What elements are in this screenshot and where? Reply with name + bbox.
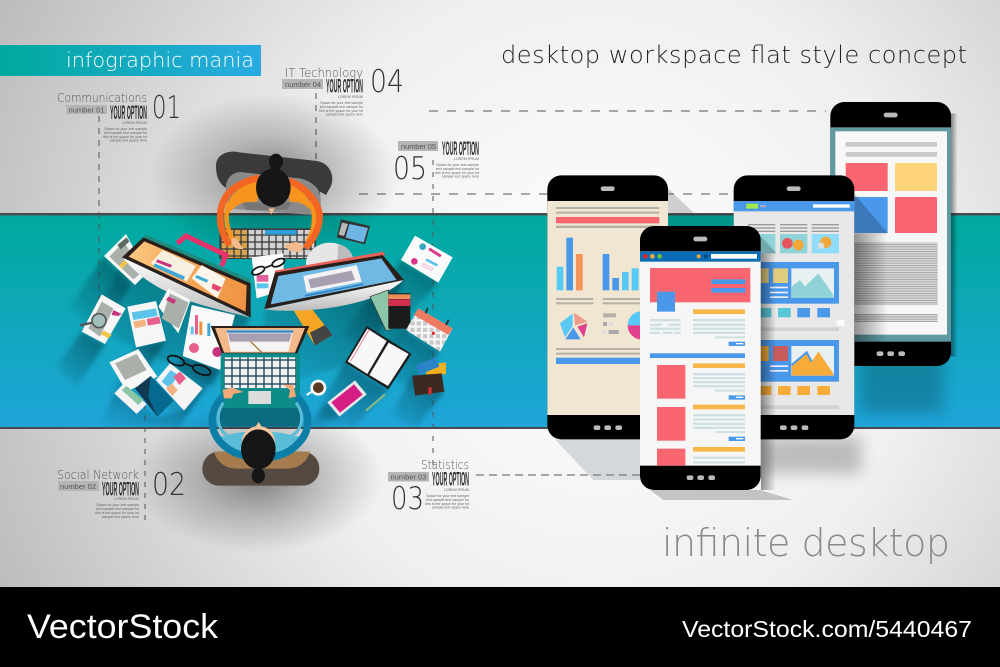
phones — [547, 102, 958, 500]
label block 02: text sample text sample for — [96, 507, 140, 511]
person at bottom: blue — [202, 385, 319, 486]
phone A: left, analytics — [547, 175, 668, 439]
books — [370, 290, 410, 331]
label block 03: LOREM IPSUM — [444, 488, 469, 492]
label block 02: sample text space here — [102, 515, 139, 519]
long item shadows — [57, 256, 444, 427]
label block 05: LOREM IPSUM — [454, 157, 479, 161]
label block 01: text sample text sample for — [104, 131, 148, 135]
tagline: infinite desktop — [662, 521, 950, 565]
label block 05: Payments — [428, 129, 479, 139]
label block 01: Communications — [57, 91, 147, 105]
text: YOUR OPTION — [432, 470, 469, 490]
label block 05: number 05 — [401, 142, 436, 151]
label block 01: LOREM IPSUM — [122, 121, 147, 125]
label block 02: YOUR OPTION — [102, 480, 139, 500]
label block 05: Space for your text sample — [436, 163, 479, 167]
turquoise desk band — [0, 213, 1000, 429]
label block 05: text sample text sample for — [436, 167, 480, 171]
label block 05: sample text space here — [442, 174, 479, 178]
banner: infographic mania — [66, 48, 254, 72]
label block 03: this is the space for your txt — [425, 502, 469, 506]
documents lower left — [109, 349, 203, 417]
label block 03: number 03 — [390, 472, 426, 482]
wallet and cards — [412, 357, 446, 396]
label block 04: IT Technology — [285, 66, 363, 80]
stand dome of right monitor — [306, 243, 354, 284]
calendar — [406, 308, 453, 352]
laptop — [211, 326, 309, 408]
label block 01: YOUR OPTION — [110, 103, 147, 124]
footer bar: VectorStock.com/5440467 — [682, 616, 972, 642]
label block 01: number 01 — [68, 106, 104, 114]
label block 02: Social Network — [57, 468, 139, 482]
footer bar — [0, 587, 1000, 667]
label block 03 — [388, 458, 470, 517]
dashed connector lines — [99, 93, 826, 522]
phone shadows — [555, 113, 958, 500]
phone D: back right — [830, 102, 951, 366]
label block 04: sample text space here — [326, 112, 363, 116]
label block 02: Space for your text sample — [96, 503, 139, 507]
label block 04 — [282, 64, 404, 116]
label block 03: 03 — [391, 481, 424, 517]
pink tablet — [327, 380, 367, 417]
label block 03: text sample text sample for — [426, 498, 470, 502]
papers at centre and glasses — [251, 253, 286, 298]
orange phone under right monitor — [293, 307, 332, 346]
label block 03: Space for your text sample — [426, 494, 469, 498]
phone B: front, blog — [640, 226, 761, 490]
label block 05 — [393, 129, 480, 187]
label block 05: 05 — [393, 151, 427, 187]
title: desktop workspace flat style concept — [501, 41, 967, 69]
label block 04: LOREM IPSUM — [338, 95, 363, 99]
coffee cup — [307, 380, 326, 396]
pencil — [366, 394, 385, 411]
label block 03: sample text space here — [432, 506, 469, 510]
label block 04: Space for your text sample — [320, 101, 363, 105]
documents left — [127, 301, 166, 347]
label block 01: 01 — [152, 90, 181, 126]
right monitor — [264, 252, 404, 311]
label block 05: this is the space for your txt — [435, 171, 479, 175]
footer bar: VectorStock — [27, 608, 219, 646]
label block 02 — [57, 467, 186, 519]
shadows cast by phone B — [753, 228, 777, 490]
label block 02: this is the space for your txt — [95, 511, 139, 515]
document with grey blocks — [158, 288, 191, 333]
glasses lower — [166, 354, 212, 377]
label block 01 — [57, 90, 181, 142]
chair: top person — [216, 152, 332, 216]
bar chart paper — [183, 305, 235, 370]
label block 01: this is the space for your txt — [103, 135, 147, 139]
tablet top right — [337, 219, 370, 244]
paper top right with charts — [401, 236, 453, 283]
desk illustration — [57, 219, 453, 427]
label block 01: sample text space here — [110, 138, 147, 142]
label block 04: text sample text sample for — [320, 105, 364, 109]
icon: paper top left — [104, 234, 147, 285]
shadows cast by phone C onto phone D — [842, 178, 888, 342]
label block 02: number 02 — [60, 482, 96, 491]
mountain card orange — [748, 340, 839, 382]
label block 04: this is the space for your txt — [319, 109, 363, 113]
open notebook — [345, 326, 412, 389]
keyboard — [219, 228, 316, 259]
mountain card — [748, 262, 839, 304]
phone C: right, cards — [734, 175, 854, 439]
label block 04: YOUR OPTION — [326, 76, 363, 98]
banner — [0, 45, 261, 76]
label block 03: Statistics — [421, 458, 469, 472]
paper with magnifier — [80, 294, 126, 344]
label block 04: number 04 — [285, 80, 321, 89]
label block 02: LOREM IPSUM — [114, 497, 139, 501]
label block 02: 02 — [152, 467, 186, 503]
pie chart — [560, 313, 587, 339]
label block 01: Space for your text sample — [104, 127, 147, 131]
bar charts — [557, 238, 639, 290]
text: YOUR OPTION — [442, 139, 479, 160]
left monitor — [122, 234, 251, 317]
soft shadows around the people — [133, 93, 398, 553]
person at top: orange — [220, 154, 320, 252]
label block 04: 04 — [370, 64, 404, 100]
